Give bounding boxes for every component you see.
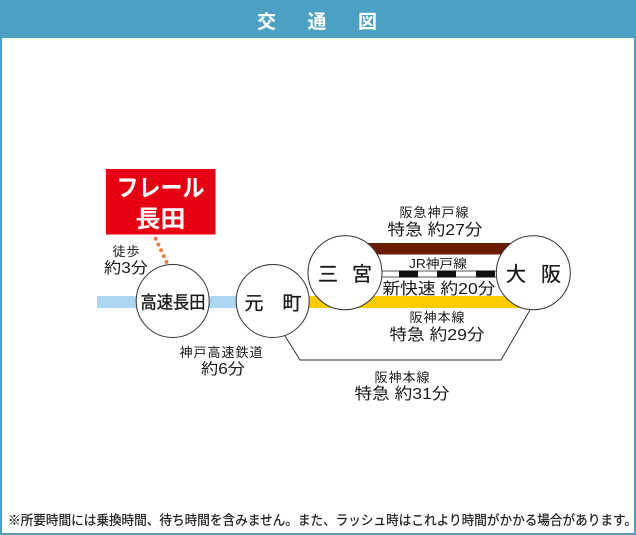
station: Kosoku Nagata [136, 264, 209, 338]
walking route dots [156, 239, 167, 263]
label: Hankyu 27 min [388, 205, 482, 239]
label: JR 20 min: 新快速 約20分 [382, 280, 496, 298]
label: Hanshin 31 min [354, 370, 450, 403]
label: Hanshin 31 min: 特急 約31分 [354, 384, 450, 403]
label: JR Kobe line: JR神戸線 [409, 256, 468, 271]
station: Motomachi: 元 町 [244, 294, 302, 314]
rail line: Hanshin main line bypass [285, 310, 530, 360]
label: Kobe Kosoku 6 min: 神戸高速鉄道 [180, 345, 262, 360]
rail line: Kobe Kosoku blue [97, 296, 247, 308]
station: Motomachi [236, 264, 309, 338]
label: Hankyu 27 min: 特急 約27分 [388, 220, 482, 239]
label: Hankyu 27 min: 阪急神戸線 [400, 205, 468, 220]
label: walk 3 min: 徒歩 [112, 244, 140, 259]
label: Kobe Kosoku 6 min: 約6分 [201, 360, 246, 378]
station: Osaka [496, 236, 570, 310]
station: Sannomiya [308, 236, 382, 310]
station: Kosoku Nagata: 高速長田 [140, 292, 206, 312]
rail line: JR striped [375, 270, 505, 278]
callout: Frail Nagata: 長田 [136, 206, 186, 233]
callout: Frail Nagata [106, 169, 216, 234]
station: Osaka: 大 阪 [506, 263, 561, 286]
label: Hanshin 31 min: 阪神本線 [374, 370, 430, 385]
header bar [0, 0, 636, 38]
label: Hanshin 29 min: 特急 約29分 [390, 325, 484, 344]
title: 交 通 図 [257, 11, 377, 33]
rail line: Hanshin yellow [300, 296, 532, 308]
station: Sannomiya: 三 宮 [318, 263, 372, 286]
label: walk 3 min [104, 244, 149, 277]
label: Hanshin 29 min [390, 310, 484, 344]
label: walk 3 min: 約3分 [104, 259, 149, 277]
callout: Frail Nagata: フレール [116, 175, 204, 202]
label: Hanshin 29 min: 阪神本線 [410, 310, 464, 325]
label: Kobe Kosoku 6 min [180, 345, 262, 378]
rail line: Hankyu brown [350, 243, 530, 254]
